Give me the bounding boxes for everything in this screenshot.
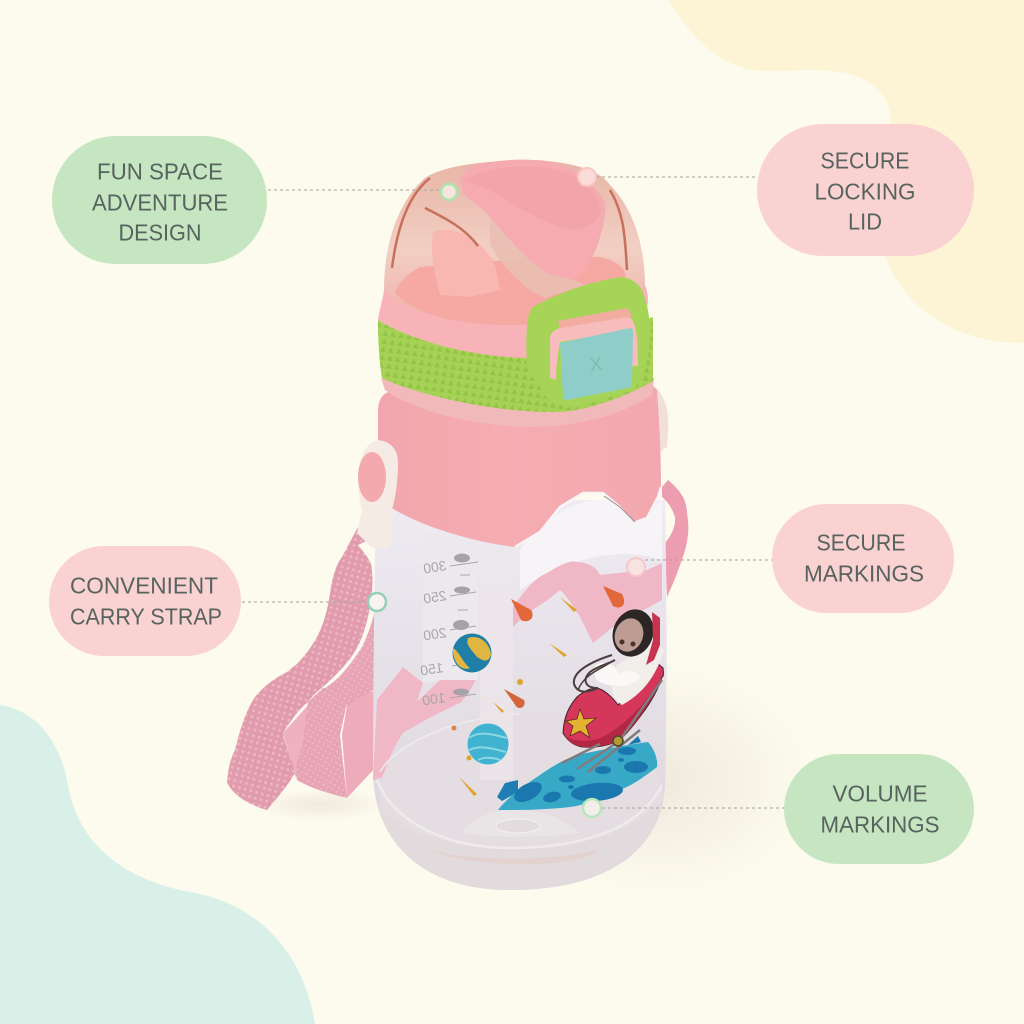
blob: bottom left teal [0, 705, 315, 1024]
moon surface [497, 736, 657, 810]
inner floor [395, 257, 625, 325]
strap seen through bottle [373, 562, 662, 780]
marker: markings [627, 558, 645, 576]
back of strap [283, 703, 310, 778]
clear body [370, 490, 670, 900]
flip lid top surface [465, 166, 601, 229]
label: secure markings [772, 504, 954, 613]
lower trim [381, 378, 654, 427]
marker: strap [368, 593, 386, 611]
carry strap: right side [662, 480, 688, 597]
label: volume markings: MARKINGS [820, 812, 940, 838]
marker: lid [578, 168, 596, 186]
bottle base [382, 771, 385, 777]
lid collar [378, 285, 648, 358]
green grip band [378, 317, 653, 412]
leader lines [242, 177, 784, 808]
label: fun space adventure design: ADVENTURE [92, 190, 228, 216]
label: secure markings: MARKINGS [804, 560, 924, 586]
planet: earth [452, 634, 492, 672]
reflections [392, 178, 627, 270]
glare under sleeve [520, 495, 662, 590]
straw [480, 550, 513, 780]
label: convenient carry strap: CONVENIENT [70, 572, 218, 598]
label: secure locking lid: SECURE [820, 148, 910, 174]
volume scale panel: 200 [422, 624, 447, 644]
long outer band [227, 527, 375, 810]
volume scale panel [420, 554, 478, 706]
label: volume markings [784, 754, 974, 864]
right side button [655, 387, 668, 452]
strap shadow [250, 789, 390, 821]
volume scale panel: 250 [422, 587, 447, 607]
volume scale panel: 100 [421, 689, 446, 709]
carry strap: left loops [227, 527, 400, 810]
label: secure locking lid: LID [848, 208, 882, 234]
blob: top right yellow [668, 0, 1024, 343]
planet: blue [468, 724, 508, 764]
lock button [560, 328, 633, 400]
label: fun space adventure design: DESIGN [118, 220, 202, 246]
clear dome [384, 160, 645, 325]
space graphic [452, 586, 664, 810]
label: convenient carry strap: CARRY STRAP [70, 604, 222, 630]
volume scale panel: 150 [419, 659, 444, 679]
label: secure markings: SECURE [816, 530, 906, 556]
meteors [511, 599, 533, 621]
label: secure locking lid: LOCKING [814, 178, 916, 204]
label: fun space adventure design: FUN SPACE [97, 158, 223, 184]
rocket sled [562, 663, 663, 772]
marker: volume [583, 799, 601, 817]
upper right band [323, 540, 400, 707]
lock clasp: X [588, 353, 604, 377]
bottle illustration [227, 160, 688, 900]
label: secure locking lid [757, 124, 974, 256]
flip lid tab [460, 160, 605, 280]
astronaut [574, 604, 664, 705]
label: volume markings: VOLUME [832, 780, 928, 806]
volume scale panel: 300 [422, 557, 447, 577]
label: convenient carry strap [49, 546, 241, 656]
front lower band [296, 688, 348, 798]
marker: design [441, 184, 457, 200]
strap buckle [357, 440, 398, 548]
inner valve [432, 230, 500, 297]
pink sleeve [378, 383, 661, 547]
label: fun space adventure design [52, 136, 267, 264]
bottle shadow [510, 665, 810, 895]
lock clasp [526, 277, 650, 408]
